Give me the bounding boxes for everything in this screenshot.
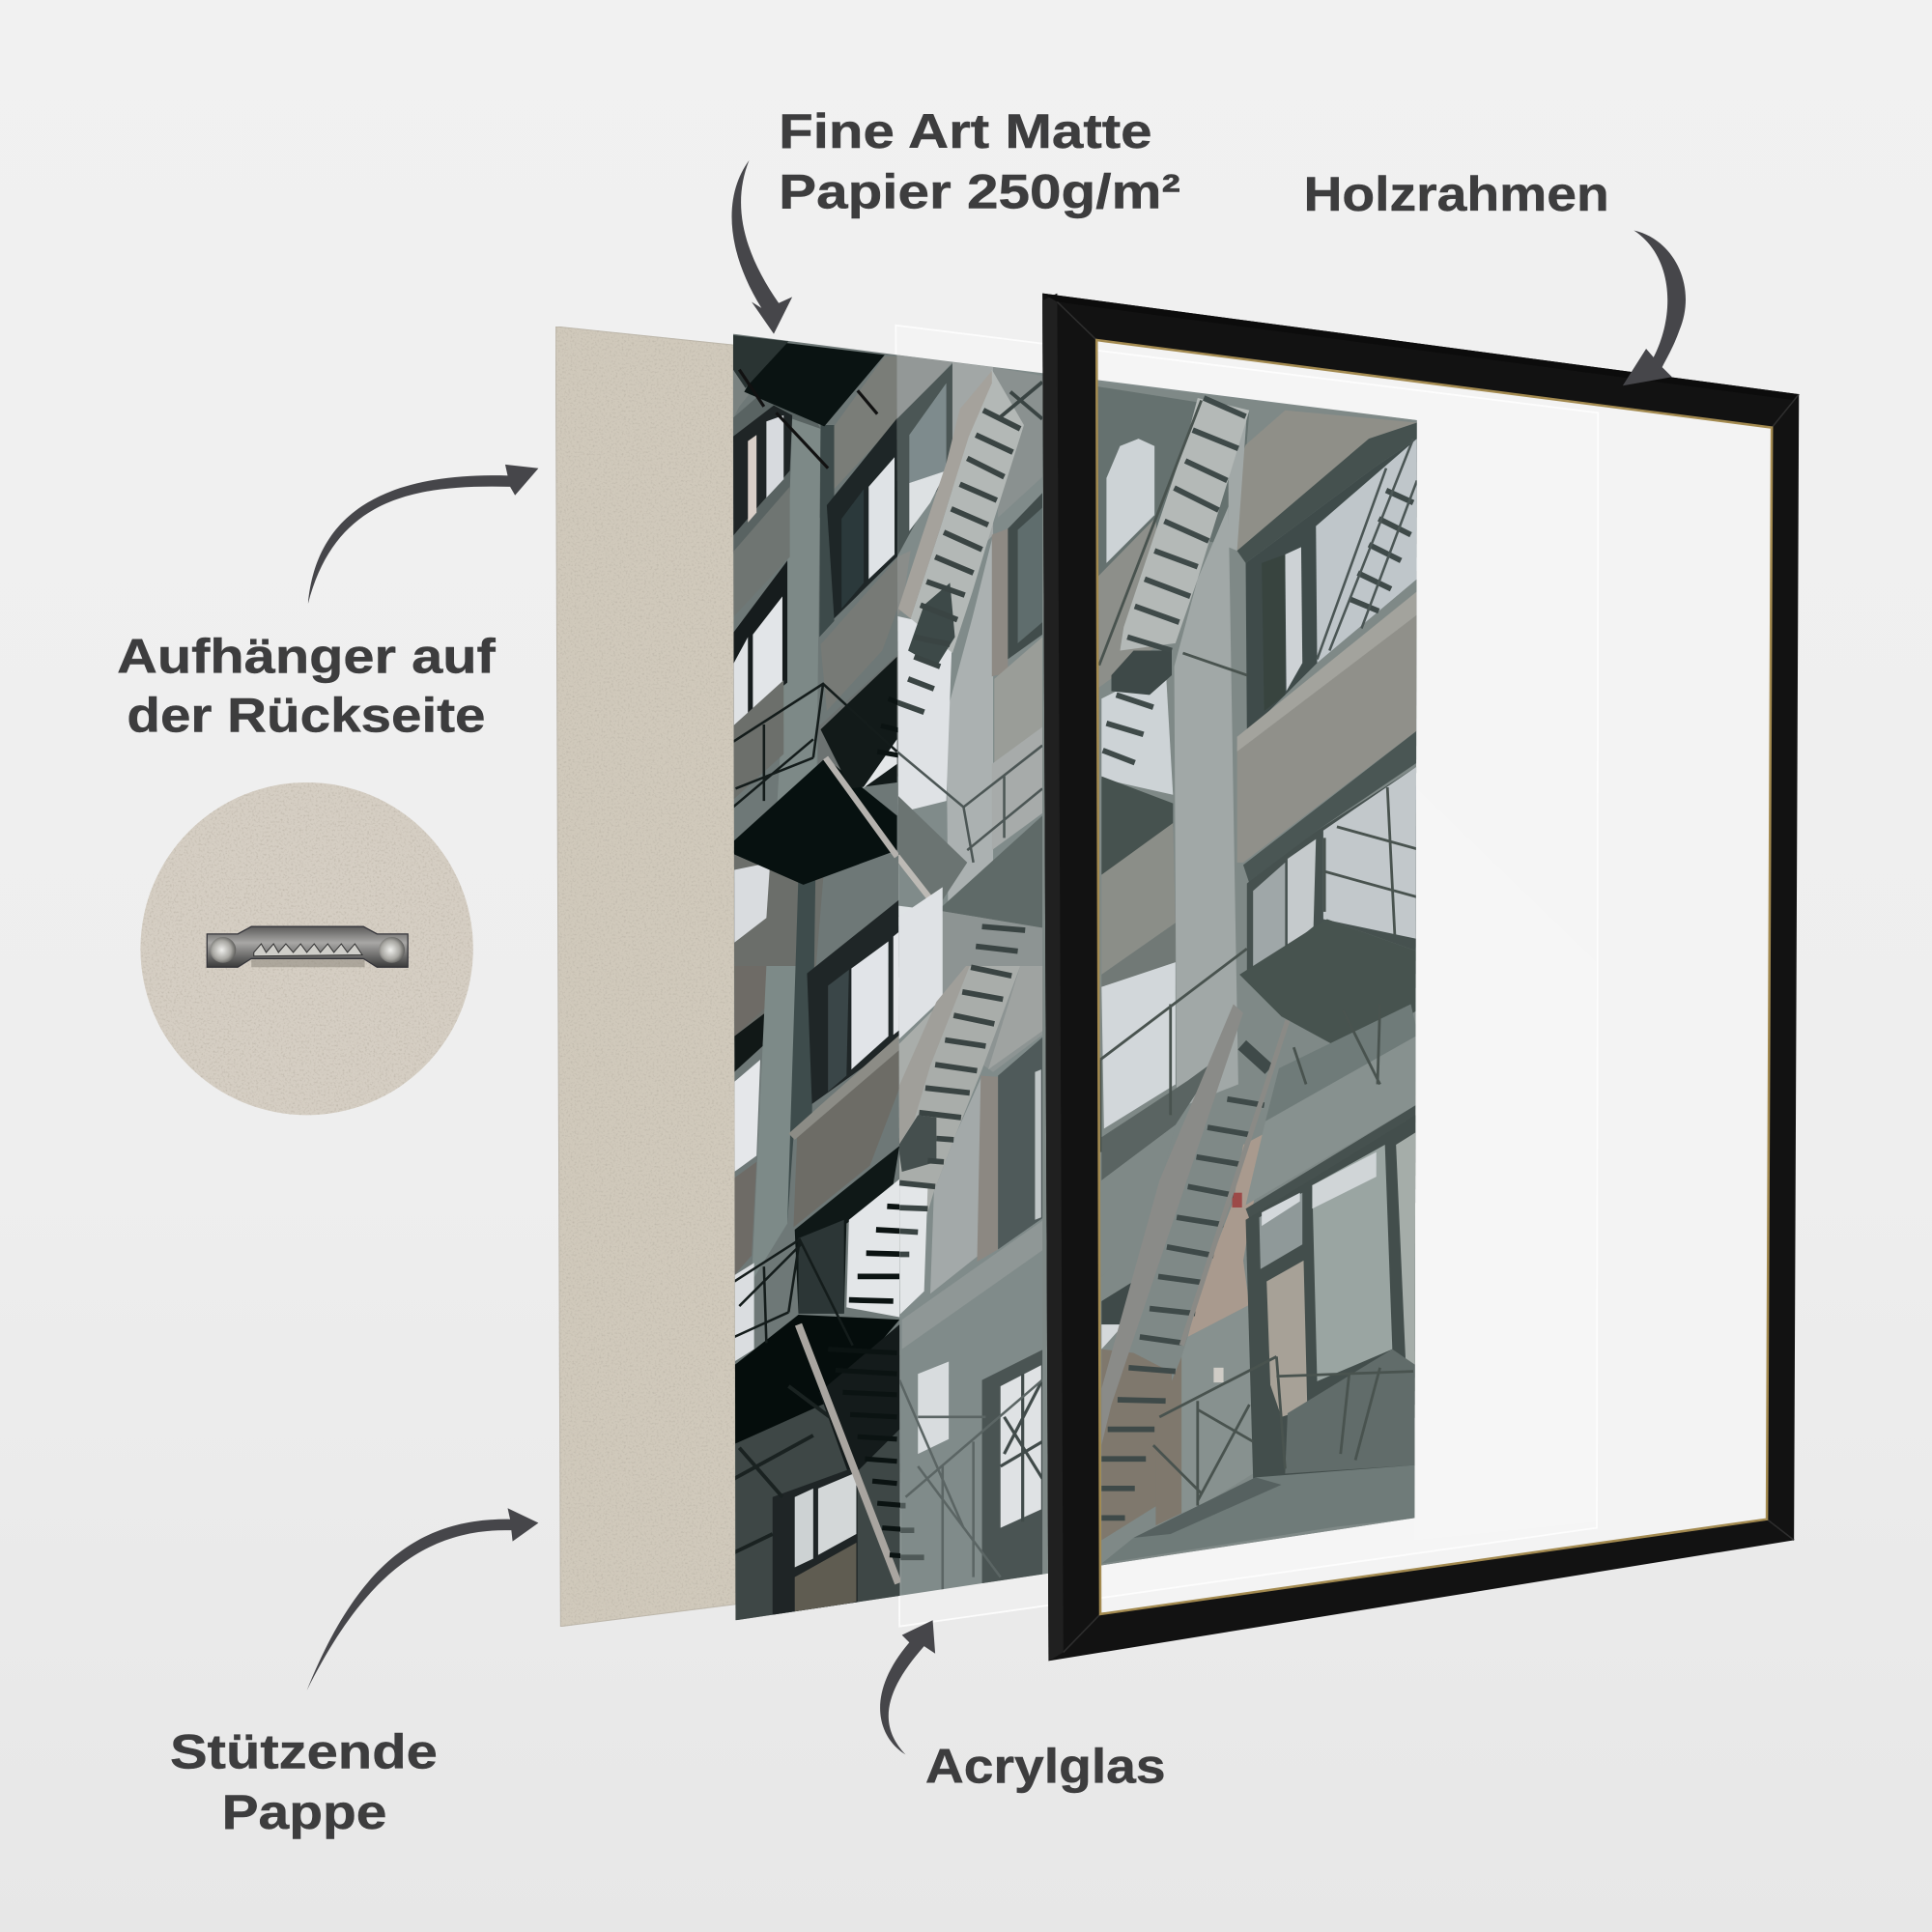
heading: fine art paper — [779, 104, 1180, 219]
wall fixture — [1213, 1368, 1224, 1382]
arrow: to cardboard bottom — [307, 1508, 538, 1690]
heading: supporting board: Stützende — [170, 1724, 438, 1778]
photo: top floors — [733, 356, 898, 802]
heading: acrylic glass: Acrylglas — [925, 1740, 1166, 1794]
icon: sawtooth hanger — [207, 926, 408, 967]
panel: frame opening background — [1096, 340, 1772, 1614]
panel: supporting cardboard — [555, 327, 735, 1627]
arrow: to acrylic — [880, 1620, 935, 1754]
heading: fine art paper: Fine Art Matte — [779, 104, 1152, 158]
frame side — [1042, 294, 1064, 1661]
photo: middle floors — [732, 850, 899, 1361]
arrow: to cardboard top — [308, 465, 538, 604]
fire alarm — [1233, 1193, 1242, 1208]
glass reflection — [1414, 788, 1596, 1540]
photo: hazed balcony — [897, 746, 1042, 1072]
photo: hazed right facade upper — [1042, 376, 1417, 1577]
heading: hanger: Aufhänger auf — [117, 629, 496, 683]
heading: supporting board — [170, 1724, 438, 1839]
photo: hazed staircases right — [1099, 398, 1417, 1518]
photo: balcony 1 — [733, 657, 897, 885]
panel: fine art print, behind acrylic — [894, 352, 1423, 1602]
photo: hazed right facade lower — [1101, 1005, 1416, 1564]
photo: balcony 2 and lower floors — [734, 1239, 899, 1627]
photo: top dark balcony — [733, 335, 885, 469]
heading: hanger: der Rückseite — [127, 689, 486, 743]
heading: supporting board: Pappe — [222, 1785, 387, 1839]
photo: hazed staircases centre — [897, 382, 1042, 1557]
circle: hanger detail — [140, 782, 473, 1115]
heading: wooden frame: Holzrahmen — [1303, 167, 1609, 221]
photo: hazed centre upper — [896, 355, 1042, 901]
photo: black staircase — [842, 699, 900, 1559]
heading: hanger — [117, 629, 496, 743]
panel: black wooden frame — [1042, 294, 1799, 1661]
frame gold inner edge — [1096, 340, 1772, 1614]
frame mitres — [1057, 301, 1799, 1652]
heading: fine art paper: Papier 250g/m² — [779, 165, 1180, 219]
arrow: to frame — [1623, 231, 1686, 385]
panel: fine art print, unglazed part — [733, 334, 900, 1621]
photo: hazed centre lower — [897, 887, 1043, 1589]
panel: acrylic glass sheet — [895, 326, 1598, 1627]
arrow: to photo paper — [732, 160, 792, 334]
